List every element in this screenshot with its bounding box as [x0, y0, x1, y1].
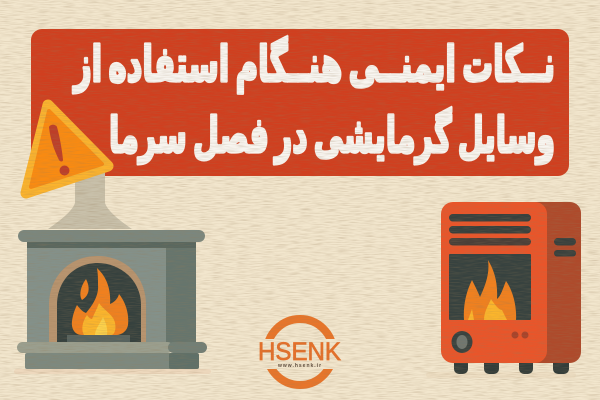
- knob highlight: [456, 335, 468, 349]
- logo web address: www.hsenk.ir: [277, 363, 322, 369]
- floor shadow: [14, 369, 211, 374]
- chimney: [48, 170, 132, 229]
- inner flame: [82, 303, 115, 335]
- grate: [67, 335, 130, 342]
- small flame: [468, 309, 474, 320]
- side flame: [80, 279, 89, 300]
- control knob: [452, 331, 472, 353]
- inner flame: [484, 299, 507, 320]
- warning triangle rim: [26, 105, 108, 193]
- floor shadow: [426, 372, 576, 378]
- outer flame: [464, 260, 516, 320]
- band under mantel: [27, 241, 196, 248]
- icon: warning triangle: [26, 105, 108, 193]
- heater front panel: [441, 202, 547, 363]
- heater window: [449, 254, 531, 320]
- logo: HSENK: [254, 319, 346, 385]
- heater flame: [464, 260, 516, 320]
- side vents: [554, 238, 576, 256]
- knob body: [452, 331, 472, 353]
- mantel: [18, 230, 205, 242]
- firebox arch trim: [49, 256, 146, 342]
- fireplace shaded side: [166, 248, 196, 348]
- indicator dots: [512, 332, 528, 338]
- flame core: [95, 317, 107, 335]
- fireplace flame: [72, 268, 128, 335]
- firebox opening: [57, 263, 141, 342]
- outer flame: [72, 268, 128, 335]
- title banner: [31, 29, 569, 176]
- fireplace body: [27, 238, 196, 348]
- hearth shelf shaded end: [168, 342, 207, 353]
- heater feet: [454, 358, 569, 374]
- fireplace illustration: [14, 170, 211, 374]
- exclamation dot: [60, 166, 70, 176]
- logo text backing: [254, 339, 346, 369]
- front vents: [449, 214, 531, 246]
- hearth base: [25, 353, 175, 369]
- hearth base shaded end: [169, 353, 199, 369]
- heater side panel: [520, 202, 581, 363]
- logo wordmark: HSENK: [258, 338, 341, 366]
- banner panel: [31, 29, 569, 176]
- warning triangle body: [31, 111, 102, 187]
- gas heater illustration: [426, 202, 581, 378]
- logo ring: [267, 319, 333, 385]
- hearth shelf: [17, 342, 173, 353]
- exclamation bar: [49, 125, 63, 162]
